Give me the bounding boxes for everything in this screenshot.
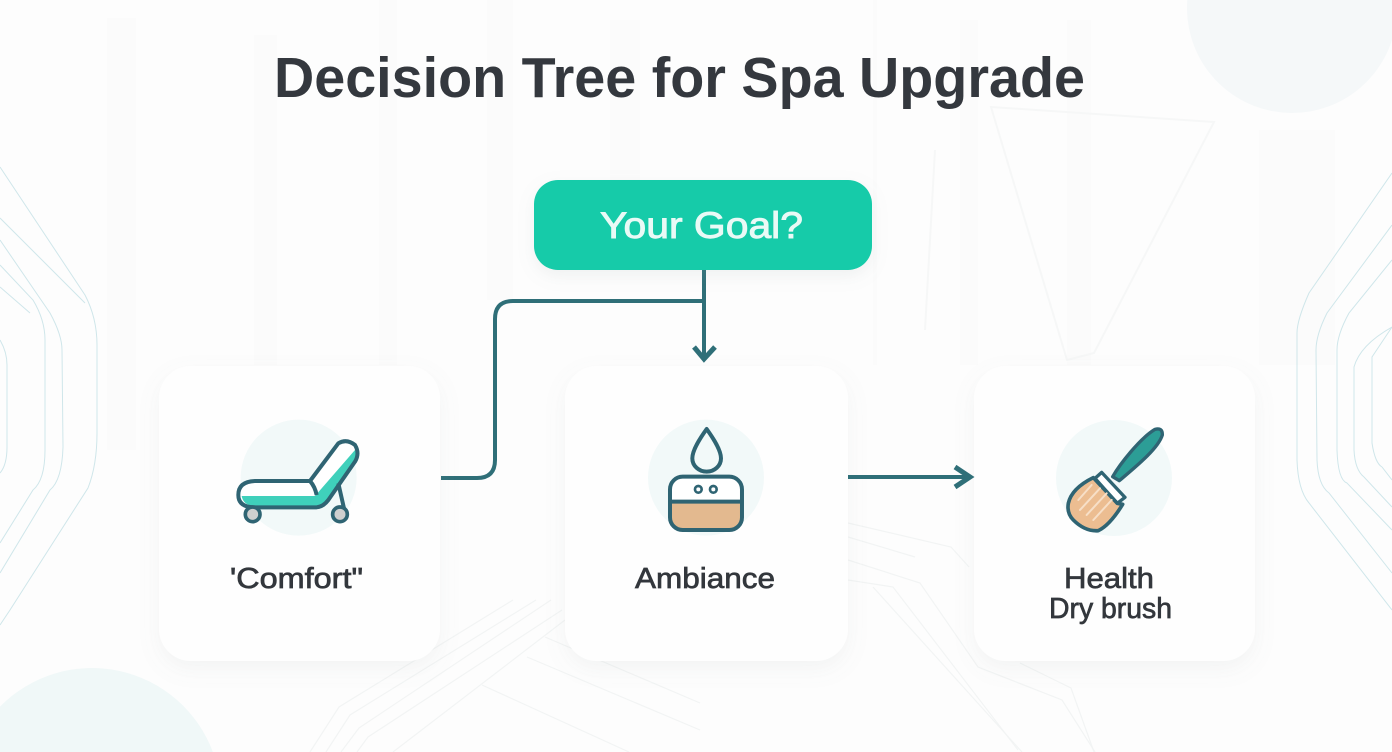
label: ambiance: Ambiance bbox=[635, 563, 775, 595]
label: health dry brush bbox=[1049, 563, 1172, 625]
label: health dry brush: Dry brush bbox=[1049, 593, 1172, 625]
icon: lounge chair bbox=[238, 420, 357, 536]
panel: health bbox=[974, 366, 1255, 661]
connector arrow: ambiance to health bbox=[848, 467, 970, 487]
label: comfort: 'Comfort" bbox=[230, 563, 363, 595]
decision node: your goal: Your Goal? bbox=[600, 205, 803, 246]
decorative circle top right bbox=[1187, 0, 1392, 113]
icon: candle bbox=[648, 420, 764, 536]
decision node: your goal bbox=[534, 180, 872, 270]
decorative line pattern right bbox=[1297, 173, 1392, 610]
connector: goal to comfort bbox=[441, 301, 704, 478]
panel: comfort bbox=[159, 366, 440, 661]
title: Decision Tree for Spa Upgrade bbox=[274, 46, 1085, 110]
label: health dry brush: Health bbox=[1064, 563, 1154, 595]
icon: dry brush bbox=[1056, 420, 1172, 536]
decorative circle bottom left bbox=[0, 668, 213, 752]
panel: ambiance bbox=[565, 366, 848, 661]
decorative faint lines bottom bbox=[310, 523, 1095, 752]
decorative line pattern left bbox=[0, 167, 97, 625]
connector arrow: goal to ambiance bbox=[694, 270, 715, 359]
